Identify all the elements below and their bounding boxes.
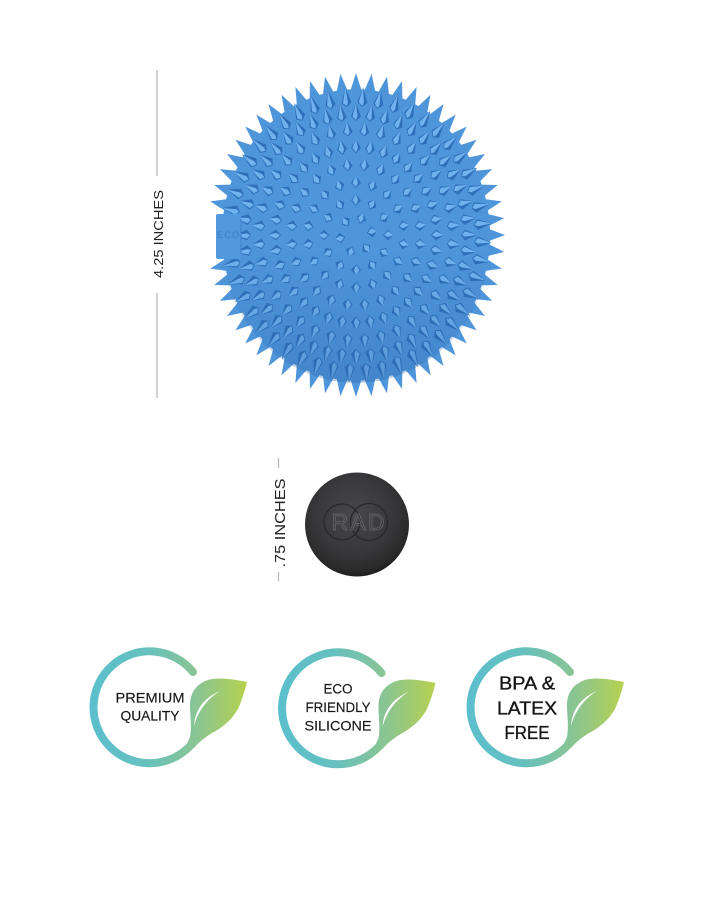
badge text: PREMIUM xyxy=(116,690,184,706)
badge: BPA and latex free xyxy=(471,651,624,763)
badge text: QUALITY xyxy=(120,708,180,724)
flat logo patch on ball xyxy=(204,214,241,259)
badge text xyxy=(304,680,372,734)
flat logo patch on ball: ECO xyxy=(217,230,239,240)
badge: premium quality xyxy=(94,651,247,763)
badge text: FRIENDLY xyxy=(306,699,371,715)
RAD logo: RAD xyxy=(332,509,384,535)
badge text: FREE xyxy=(504,723,550,743)
black massage ball xyxy=(305,472,409,576)
badge text xyxy=(116,690,184,724)
badge text: ECO xyxy=(324,680,353,696)
badge: eco friendly silicone xyxy=(282,652,436,764)
label: 4.25 inches: 4.25 INCHES xyxy=(151,190,166,278)
badge text xyxy=(497,674,557,743)
badge text: LATEX xyxy=(497,698,557,718)
badge text: BPA & xyxy=(499,674,555,694)
size line: .75 inches xyxy=(273,458,289,581)
label: .75 inches: .75 INCHES xyxy=(273,478,289,568)
badge text: SILICONE xyxy=(304,718,372,734)
blue spiky massage ball xyxy=(159,21,553,449)
